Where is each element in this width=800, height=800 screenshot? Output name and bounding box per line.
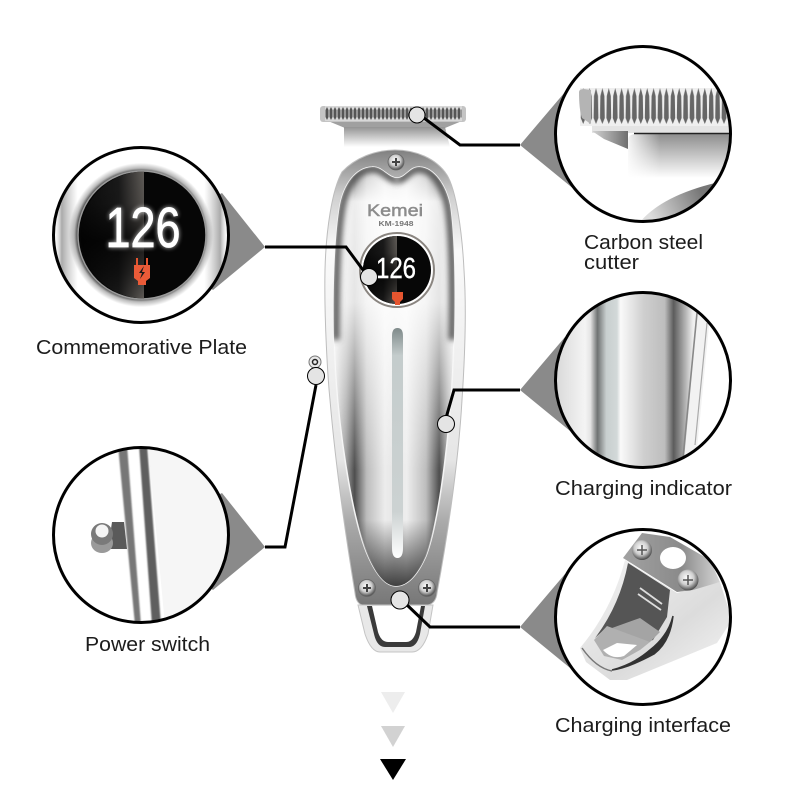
magnified cutter	[557, 88, 729, 220]
magnified switch	[91, 449, 227, 621]
screws	[632, 540, 652, 560]
clipper body inner pan	[334, 167, 455, 586]
clipper blade head	[320, 106, 466, 147]
small display: 126	[376, 253, 416, 285]
dark front rim	[612, 616, 673, 670]
pointer triangle	[141, 493, 265, 590]
label: Power switch: Power switch	[85, 633, 210, 656]
plug icon	[137, 258, 147, 265]
label: Commemorative Plate: Commemorative Plate	[36, 336, 247, 359]
magnified charging port	[557, 533, 729, 680]
magnified body side	[557, 294, 709, 466]
pointer triangle	[520, 337, 643, 435]
label: Charging indicator: Charging indicator	[555, 477, 732, 500]
pointer triangle	[520, 574, 643, 672]
model number: KM-1948	[378, 219, 414, 228]
callout: charging indicator	[520, 290, 735, 470]
label: Carbon steel cutter	[584, 231, 703, 274]
callout: charging interface	[520, 529, 732, 705]
label: Charging interface: Charging interface	[555, 714, 731, 737]
port cavity	[595, 563, 670, 643]
callout: commemorative plate	[53, 147, 265, 323]
charging loop	[358, 605, 433, 652]
pointer triangle	[141, 193, 265, 290]
magnified display: 126	[106, 196, 180, 260]
scroll-down arrows	[380, 692, 406, 780]
switch knob	[110, 522, 127, 549]
clipper product image	[309, 106, 466, 652]
center slot	[392, 328, 403, 558]
lower opening	[594, 626, 650, 660]
brand name: Kemei	[367, 201, 423, 220]
label: Carbon steel cutter: cutter	[584, 251, 639, 274]
callout: power switch	[53, 445, 265, 625]
pointer triangle	[520, 92, 643, 190]
leader lines and dots	[265, 107, 520, 627]
screws	[358, 154, 436, 596]
small display	[360, 233, 434, 307]
switch nub	[309, 356, 321, 368]
body	[580, 560, 732, 680]
magnified display	[56, 164, 227, 306]
top plate	[623, 533, 720, 592]
callout: carbon steel cutter	[520, 46, 732, 230]
magnified display: 126	[106, 196, 180, 260]
usb slot	[638, 588, 662, 610]
clipper body outer shell	[325, 150, 465, 605]
label: Carbon steel cutter: Carbon steel	[584, 231, 703, 254]
